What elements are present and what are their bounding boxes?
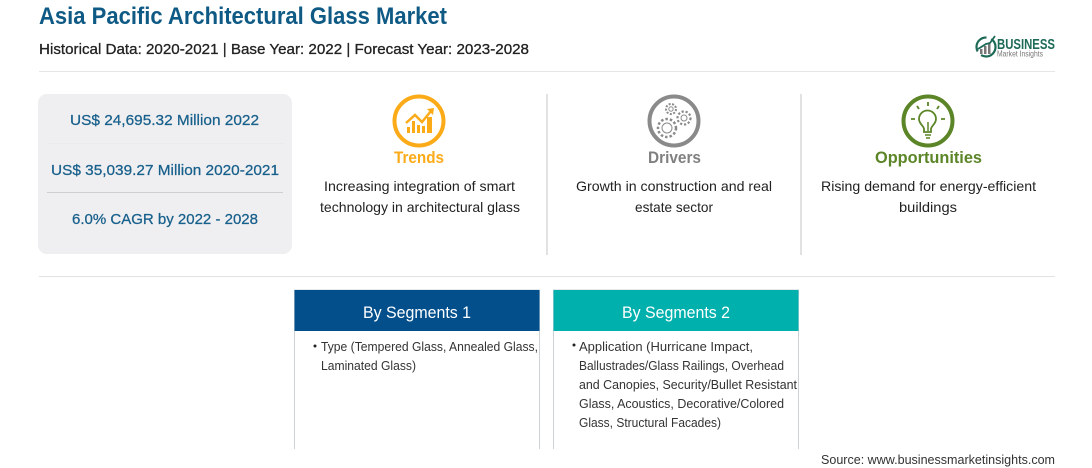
text: trends: Increasing integration of smart bbox=[324, 178, 515, 194]
source note: Source: www.businessmarketinsights.com bbox=[821, 453, 1055, 467]
value: 2020-2021 market size: US$ 35,039.27 Million 2020-2021 bbox=[51, 162, 279, 179]
panel: key figures bbox=[38, 94, 292, 254]
list: type: Laminated Glass) bbox=[321, 359, 416, 373]
list: application: Ballustrades/Glass Railings, Overhead bbox=[579, 359, 784, 373]
list: application: and Canopies, Security/Bullet Resistant bbox=[579, 378, 798, 392]
list: application: Application (Hurricane Impact, bbox=[579, 340, 753, 354]
text: opportunities bbox=[821, 178, 1036, 215]
icon: drivers bbox=[650, 96, 698, 146]
icon: opportunities bbox=[904, 96, 952, 146]
subtitle: data years: Historical Data: 2020-2021 | Base Year: 2022 | Forecast Year: 2023-2028 bbox=[39, 41, 529, 58]
heading: trends: Trends bbox=[394, 148, 444, 167]
panel: segments 2 bbox=[554, 290, 798, 449]
list: type: Type (Tempered Glass, Annealed Glass, bbox=[321, 340, 538, 354]
logo: Business Market Insights bbox=[976, 36, 1055, 58]
text: drivers: Growth in construction and real bbox=[576, 178, 772, 194]
text: drivers bbox=[576, 178, 772, 215]
header: by segments 1 bbox=[294, 290, 540, 331]
heading: drivers: Drivers bbox=[648, 148, 701, 167]
list: type bbox=[314, 340, 538, 373]
logo: Business Market Insights: BUSINESS bbox=[997, 37, 1055, 53]
header: by segments 2 bbox=[554, 290, 798, 331]
list: application: Glass, Structural Facades) bbox=[579, 416, 721, 430]
title: Asia Pacific Architectural Glass Market bbox=[39, 3, 447, 30]
panel: segments 1 bbox=[294, 290, 540, 449]
text: trends bbox=[320, 178, 520, 215]
text: opportunities: Rising demand for energy-efficient bbox=[821, 178, 1036, 194]
text: opportunities: buildings bbox=[899, 199, 957, 215]
list: application bbox=[572, 340, 798, 430]
logo: Business Market Insights: Market Insights bbox=[997, 50, 1043, 58]
text: drivers: estate sector bbox=[635, 199, 713, 215]
list: application: Glass, Acoustics, Decorative/Colored bbox=[579, 397, 784, 411]
text: trends: technology in architectural glass bbox=[320, 199, 520, 215]
header: by segments 1: By Segments 1 bbox=[363, 303, 471, 322]
header: by segments 2: By Segments 2 bbox=[622, 303, 730, 322]
heading: opportunities: Opportunities bbox=[875, 148, 982, 167]
value: CAGR: 6.0% CAGR by 2022 - 2028 bbox=[72, 211, 258, 228]
value: 2022 market size: US$ 24,695.32 Million 2022 bbox=[70, 112, 259, 129]
icon: trends bbox=[394, 96, 444, 146]
